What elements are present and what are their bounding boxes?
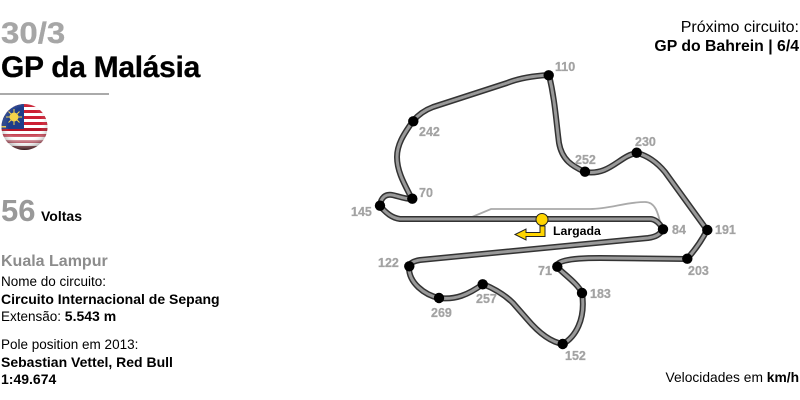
date: 30/3 (1, 17, 65, 50)
speed labels: 122 (378, 256, 399, 270)
next circuit: GP do Bahrein | 6/4 (654, 38, 799, 55)
speed labels: 230 (635, 135, 656, 149)
speed labels: 145 (351, 205, 372, 219)
laps label: Voltas (41, 208, 82, 224)
next circuit (654, 19, 799, 55)
circuit track (380, 75, 707, 344)
speed labels: 252 (575, 153, 596, 167)
lap count: 56 (1, 193, 35, 228)
speed labels: 71 (538, 264, 552, 278)
circuit name text block: Nome do circuito: (1, 274, 106, 289)
divider line (0, 93, 109, 95)
start label: Largada (553, 224, 601, 238)
pole position text block: Pole position em 2013: (1, 337, 138, 352)
speed labels (351, 60, 736, 363)
speed labels: 203 (688, 264, 709, 278)
speed labels: 242 (419, 125, 440, 139)
location: Kuala Lampur (1, 253, 108, 270)
title: GP da Malásia (1, 51, 200, 84)
speed labels: 183 (590, 287, 611, 301)
speed labels: 269 (431, 306, 452, 320)
circuit name text block (1, 274, 220, 324)
next circuit: Próximo circuito: (681, 19, 799, 36)
pole position text block (1, 337, 173, 387)
pit lane (472, 202, 661, 226)
icon: Malaysia flag ball (2, 104, 48, 150)
start marker arrow (515, 214, 548, 240)
speed labels: 152 (565, 349, 586, 363)
speed labels: 110 (555, 60, 575, 74)
circuit name text block: Extensão: 5.543 m (1, 308, 116, 324)
speed labels: 257 (476, 292, 497, 306)
pole position text block: 1:49.674 (1, 371, 56, 387)
speed labels: 84 (672, 223, 686, 237)
circuit name text block: Circuito Internacional de Sepang (1, 290, 220, 306)
speed unit note: Velocidades em km/h (666, 370, 799, 385)
speed labels: 191 (715, 223, 736, 237)
speed points (375, 70, 712, 349)
pole position text block: Sebastian Vettel, Red Bull (1, 354, 173, 370)
speed labels: 70 (419, 186, 433, 200)
